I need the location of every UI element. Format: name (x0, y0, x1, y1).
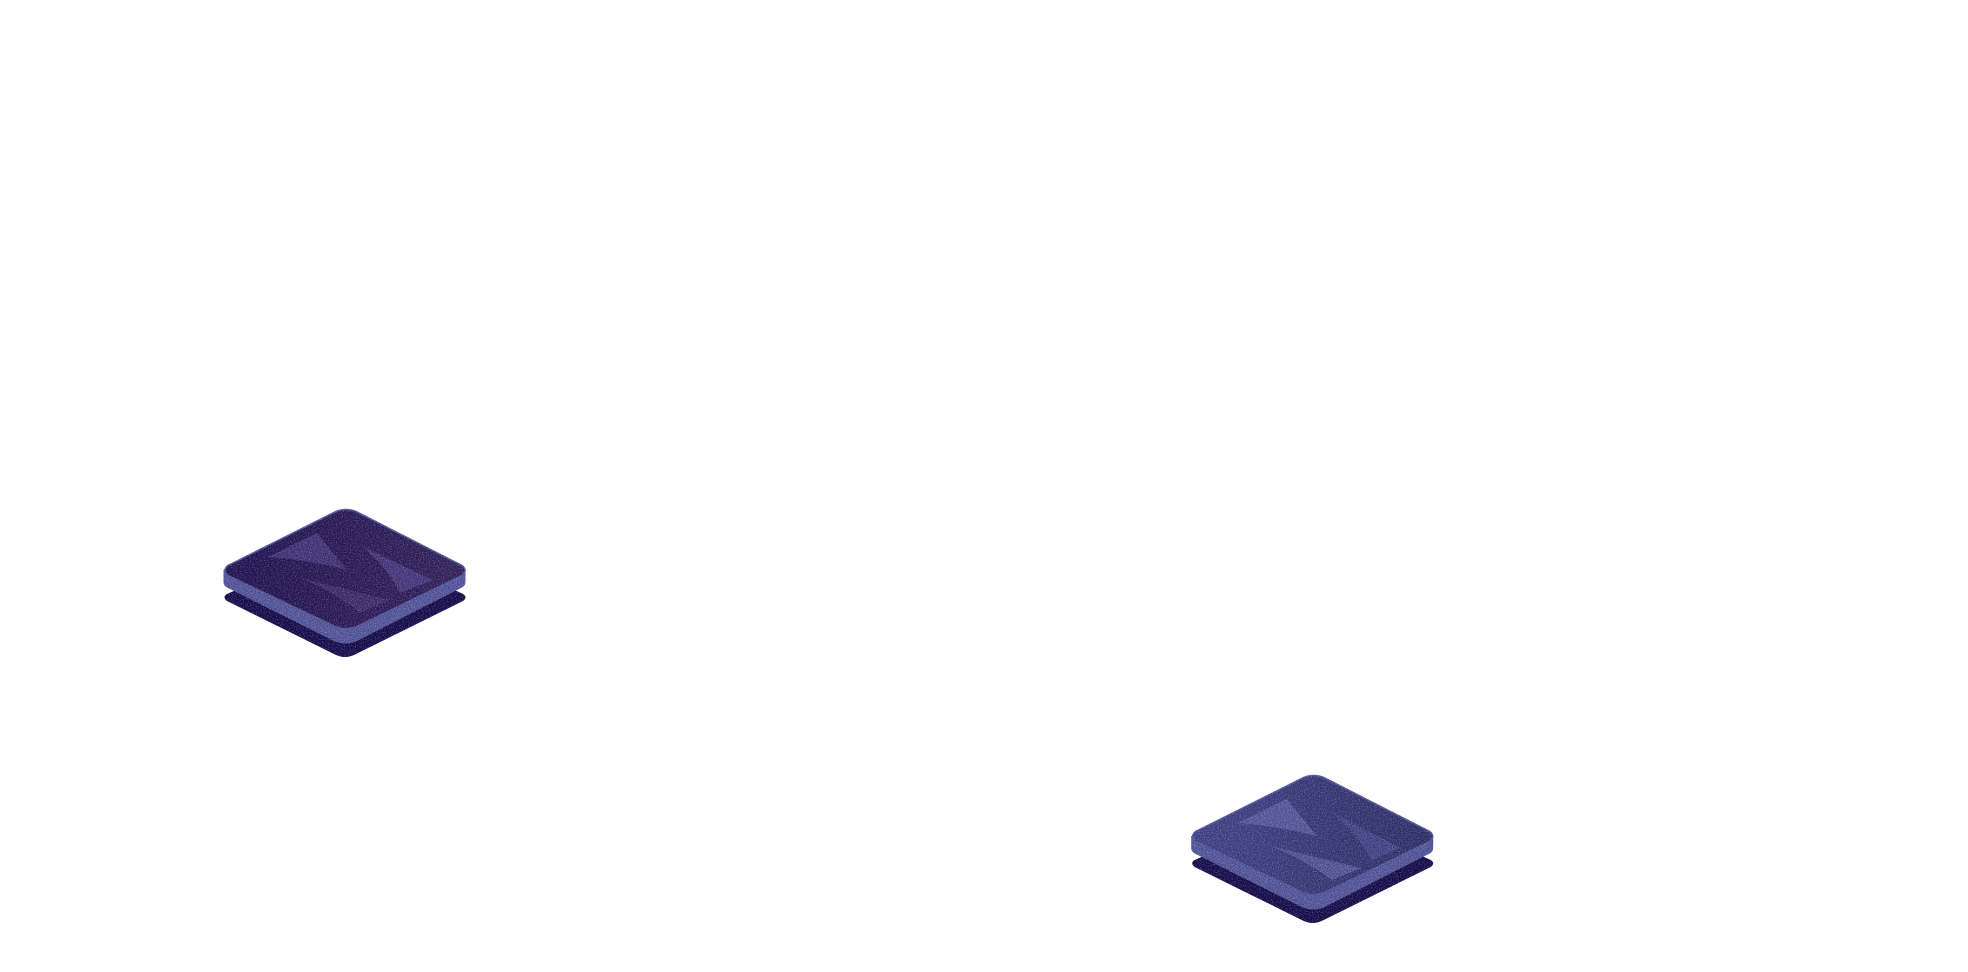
tile shadow layer (224, 540, 466, 657)
icon: dark purple isometric tile (224, 510, 466, 657)
tile top face (1193, 776, 1433, 895)
tile facet left (1238, 799, 1317, 836)
icon: blue isometric tile (1191, 776, 1433, 923)
tile facet right (363, 547, 433, 593)
tile facet right (1333, 813, 1401, 860)
tile side edge (1191, 836, 1433, 910)
tile facet bottom (1270, 846, 1362, 880)
tile shadow layer (1192, 806, 1433, 923)
tile side edge (224, 570, 466, 644)
tile facet left (268, 533, 347, 570)
tile facet bottom (300, 578, 390, 613)
tile top face (225, 510, 465, 629)
